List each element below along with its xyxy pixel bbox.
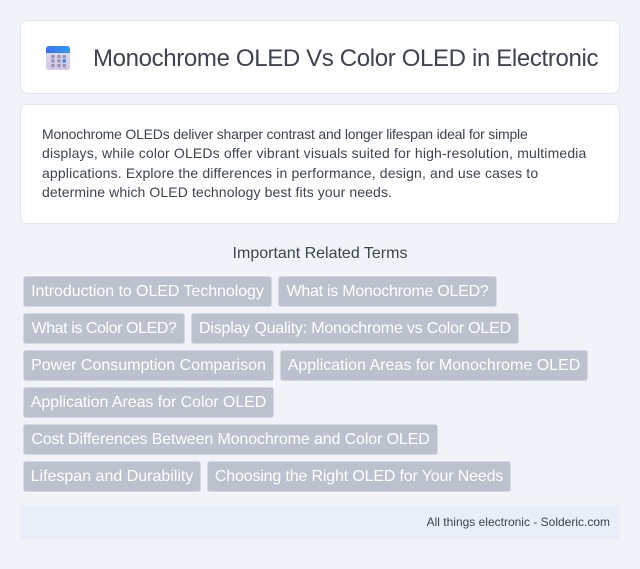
tag: Introduction to OLED Technology [31, 283, 264, 300]
description text: Monochrome OLEDs deliver sharper contrast and longer lifespan ideal for simple [42, 126, 528, 142]
description card [20, 104, 620, 224]
tag [23, 387, 274, 418]
tag: Power Consumption Comparison [31, 357, 266, 374]
tag [280, 350, 588, 381]
section heading: Important Related Terms [233, 245, 407, 262]
tag [23, 313, 185, 344]
tag [191, 313, 519, 344]
tag: Choosing the Right OLED for Your Needs [215, 468, 503, 485]
description text: applications. Explore the differences in performance, design, and use cases to [42, 165, 538, 181]
tag: What is Color OLED? [32, 320, 176, 337]
tag: Application Areas for Monochrome OLED [288, 357, 580, 374]
tag: Lifespan and Durability [31, 468, 193, 485]
tag: Cost Differences Between Monochrome and Color OLED [31, 431, 430, 448]
description text [42, 126, 586, 200]
tag [207, 461, 511, 492]
tag [278, 276, 497, 307]
footer text: All things electronic - Solderic.com [427, 515, 610, 529]
tag [23, 276, 272, 307]
tag [23, 424, 438, 455]
tag [23, 461, 201, 492]
header card [20, 20, 620, 94]
footer bar [20, 505, 620, 539]
description text: determine which OLED technology best fits your needs. [42, 184, 392, 200]
description text: displays, while color OLEDs offer vibrant visuals suited for high-resolution, multimedia [42, 145, 586, 161]
tag: What is Monochrome OLED? [286, 283, 489, 300]
icon: calendar grid [46, 46, 70, 70]
tag: Display Quality: Monochrome vs Color OLED [199, 320, 511, 337]
tag: Application Areas for Color OLED [31, 394, 266, 411]
tag [23, 350, 274, 381]
title: Monochrome OLED Vs Color OLED in Electronic [93, 45, 598, 72]
